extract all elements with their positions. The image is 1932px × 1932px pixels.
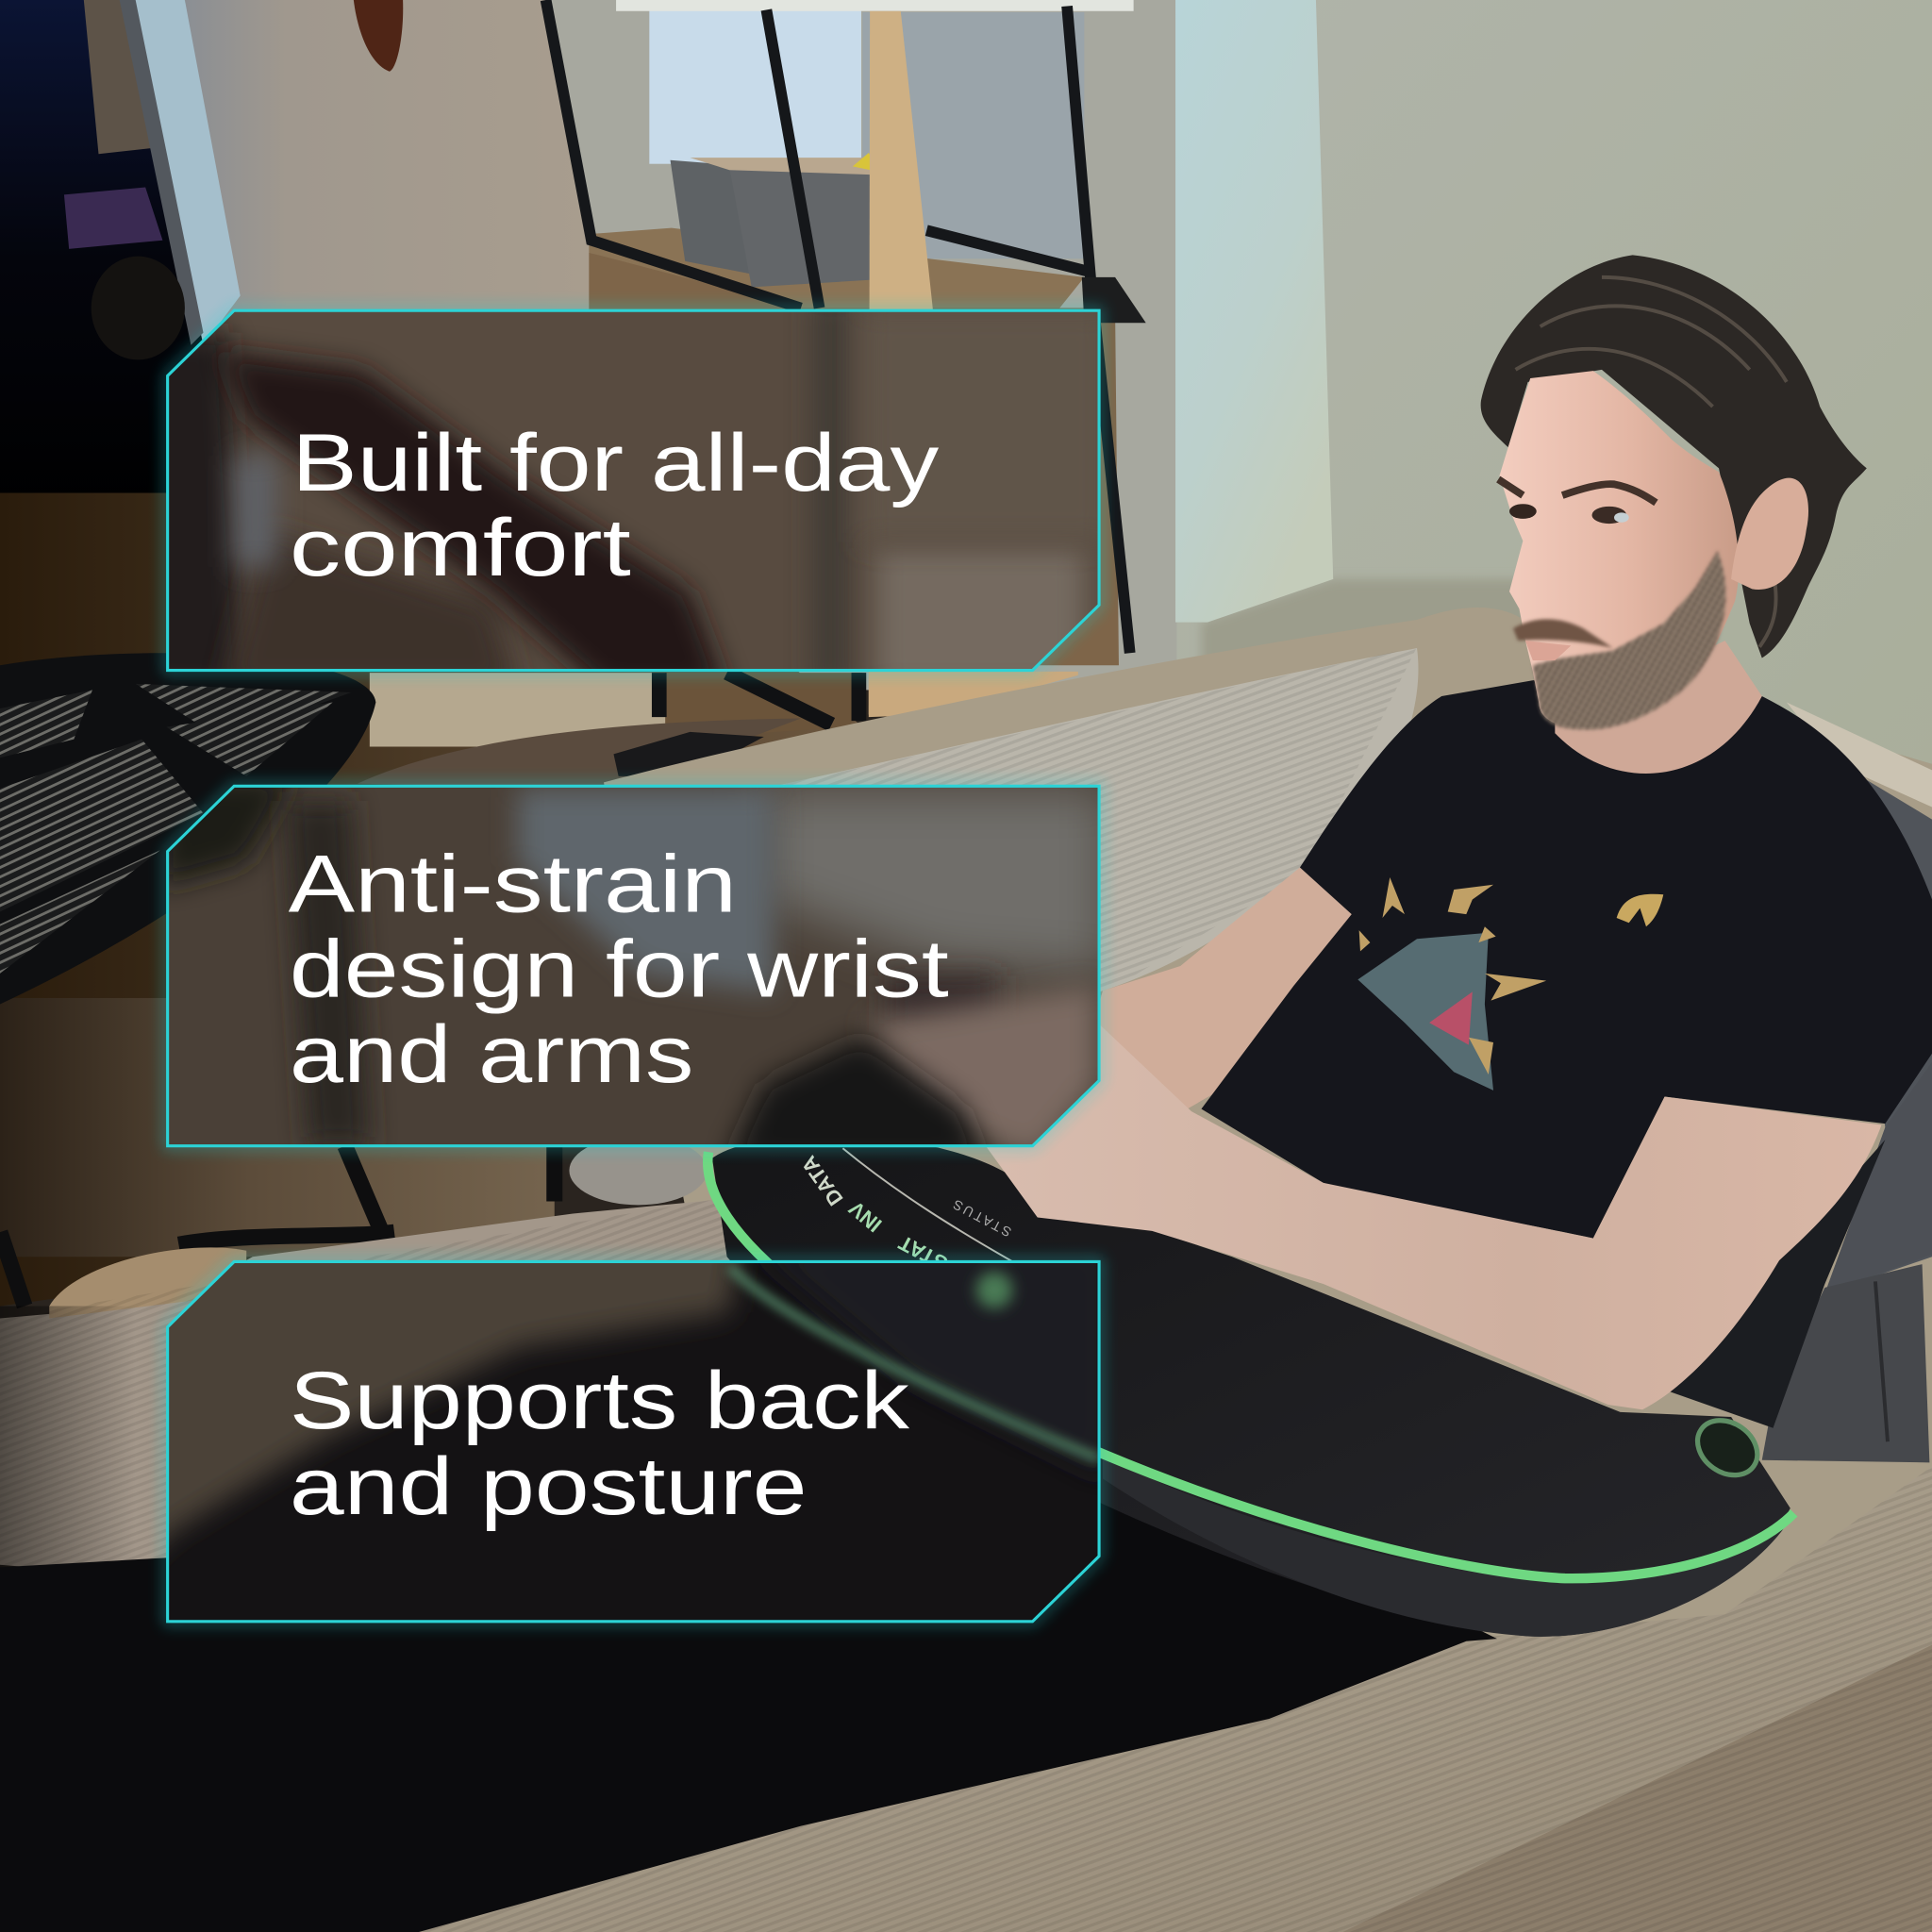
ear [1731,478,1808,590]
panel frosted backdrop [160,776,1109,1164]
sofa pillow [764,648,1418,991]
doorway [0,0,204,518]
panel border [168,786,1099,1146]
T-shirt [1201,680,1932,1239]
near arm and hand [986,1025,1881,1409]
panel text: Built for all-day [292,418,939,508]
hair back [1481,255,1867,658]
baskets [671,160,749,274]
far arm [1091,868,1352,1115]
floor [0,492,862,1306]
cushion lettering: INV [844,1196,887,1237]
cushion [712,1136,1790,1637]
trousers [0,1441,1497,1932]
panel glow [168,1261,1099,1622]
face [1500,371,1739,728]
panel glow [168,310,1099,671]
cushion logo [1687,1409,1768,1487]
door frame [129,0,241,345]
back support cushion [1665,761,1932,1462]
wall plaque [354,0,403,72]
lips [1525,641,1571,660]
sofa seat [419,1466,1932,1932]
cushion green trim [708,1152,1794,1578]
cushion lettering: STAT [894,1230,952,1275]
moustache [1513,619,1613,648]
panel border [168,310,1099,671]
eyebrows and eyes [1498,479,1656,524]
panel text: and arms [290,1009,693,1100]
sofa left section [0,1198,887,1571]
hair strands [1516,277,1787,647]
low wood table with socket [358,718,801,789]
panel text: Anti-strain [289,840,737,930]
panel border [168,1261,1099,1622]
recessed shelf wall [542,0,1176,690]
patterned round table [0,653,375,1004]
pillar [1175,0,1333,623]
bag in doorway [64,188,162,249]
beard [1533,551,1725,729]
shelf unit [546,0,1146,715]
panel text: Supports back [290,1356,910,1446]
panel glow [168,786,1099,1146]
sofa back [419,608,1932,1932]
wood leg [869,11,937,715]
panel frosted backdrop [169,311,1098,669]
basket in doorway [92,257,185,359]
shirt print [1357,877,1546,1091]
panel text: comfort [290,503,631,593]
panel: Built for all-day comfort [124,295,1109,690]
right wall [1171,0,1932,887]
wood stool legs [869,672,1078,717]
panel text: design for wrist [290,924,949,1015]
cabinet [589,253,1119,665]
table legs and cable [0,1146,555,1306]
cushion lettering [797,1148,1014,1275]
panel: Anti-strain design for wrist and arms [160,776,1109,1164]
panel frosted backdrop [169,1263,1098,1621]
small grey cushion [569,1136,708,1205]
panel text: and posture [290,1441,808,1532]
panel: Supports back and posture [124,1232,1109,1626]
shirt logo [1617,894,1663,926]
yellow tag [853,153,882,173]
wood shelf board [589,228,1084,308]
cushion lettering: DATA [797,1152,848,1210]
cushion lettering: STATUS [949,1195,1014,1240]
left wall [185,0,591,690]
neck [1555,641,1762,774]
